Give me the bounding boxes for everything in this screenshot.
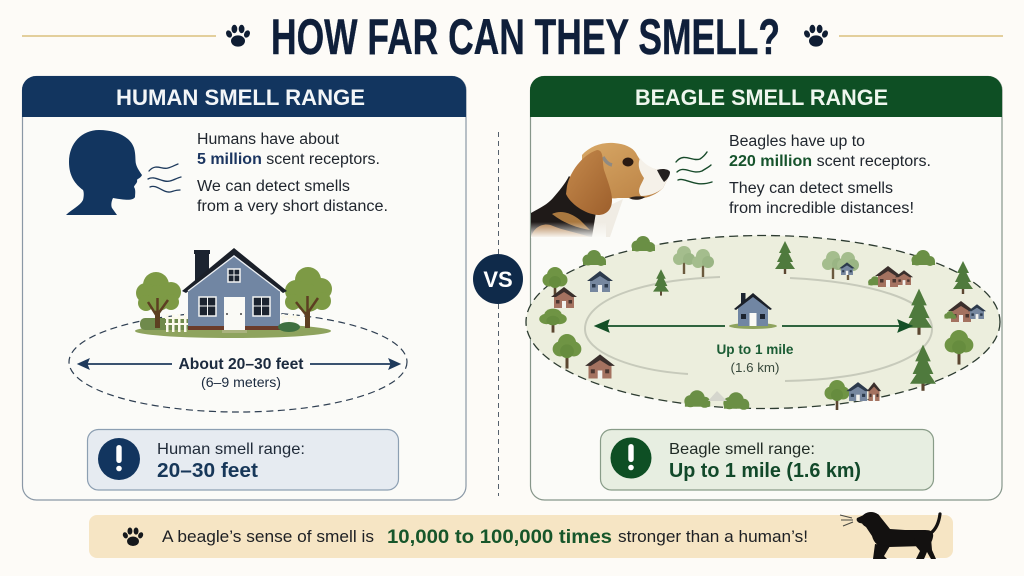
beagle panel header — [530, 76, 1002, 117]
icon: banner paw — [122, 527, 144, 546]
banner: smell strength comparison — [89, 512, 953, 559]
beagle facts text — [729, 133, 931, 217]
human callout text: 20–30 feet — [157, 460, 258, 482]
illustration: house with trees — [135, 248, 332, 338]
beagle facts text: They can detect smells — [729, 180, 893, 197]
panel: human smell range — [22, 76, 466, 500]
human panel header — [22, 76, 466, 117]
scenery: trees and houses around the range — [539, 236, 986, 410]
beagle facts text: Beagles have up to — [729, 133, 865, 150]
icon: dog silhouette sniffing — [840, 512, 940, 559]
human facts text: from a very short distance. — [197, 198, 388, 215]
illustration: beagle head — [531, 143, 670, 238]
human callout text: Human smell range: — [157, 441, 305, 458]
icon: beagle smell waves — [676, 152, 712, 184]
icon: human alert — [98, 438, 140, 480]
icon: beagle alert — [610, 438, 652, 478]
banner text — [162, 527, 808, 548]
beagle facts text: from incredible distances! — [729, 200, 914, 217]
banner text: A beagle’s sense of smell is — [162, 528, 374, 546]
beagle callout text: Up to 1 mile (1.6 km) — [669, 460, 861, 482]
range label: human — [178, 356, 304, 390]
range ellipse: human — [69, 312, 407, 412]
beagle callout text — [669, 441, 861, 482]
title: HOW FAR CAN THEY SMELL? — [271, 9, 780, 65]
beagle callout text: Beagle smell range: — [669, 441, 815, 458]
banner text: 10,000 to 100,000 times — [387, 527, 612, 548]
icon: human head silhouette — [66, 130, 142, 215]
range map: beagle — [526, 236, 1000, 410]
human callout text — [157, 441, 305, 482]
divider with VS badge: VS — [483, 267, 513, 292]
human facts text: We can detect smells — [197, 178, 350, 195]
range label: human: About 20–30 feet — [178, 356, 304, 373]
human panel heading: HUMAN SMELL RANGE — [116, 85, 365, 110]
range label: beagle: (1.6 km) — [730, 360, 780, 375]
arrow: beagle range — [595, 320, 912, 332]
range label: beagle — [716, 341, 794, 375]
human facts text: 5 million scent receptors. — [197, 151, 380, 168]
divider with VS badge — [473, 132, 523, 496]
human facts text: Humans have about — [197, 131, 340, 148]
callout: human smell range — [88, 430, 398, 490]
callout: beagle smell range — [600, 430, 934, 490]
illustration: central house — [729, 293, 777, 329]
beagle panel heading: BEAGLE SMELL RANGE — [635, 85, 888, 110]
icon: human smell waves — [148, 164, 181, 192]
range label: beagle: Up to 1 mile — [716, 341, 794, 357]
banner text: stronger than a human’s! — [618, 528, 808, 546]
beagle facts text: 220 million scent receptors. — [729, 153, 931, 170]
range label: human: (6–9 meters) — [201, 375, 281, 390]
arrow: human range — [78, 359, 400, 369]
panel: beagle smell range — [526, 76, 1002, 500]
human facts text — [197, 131, 388, 215]
